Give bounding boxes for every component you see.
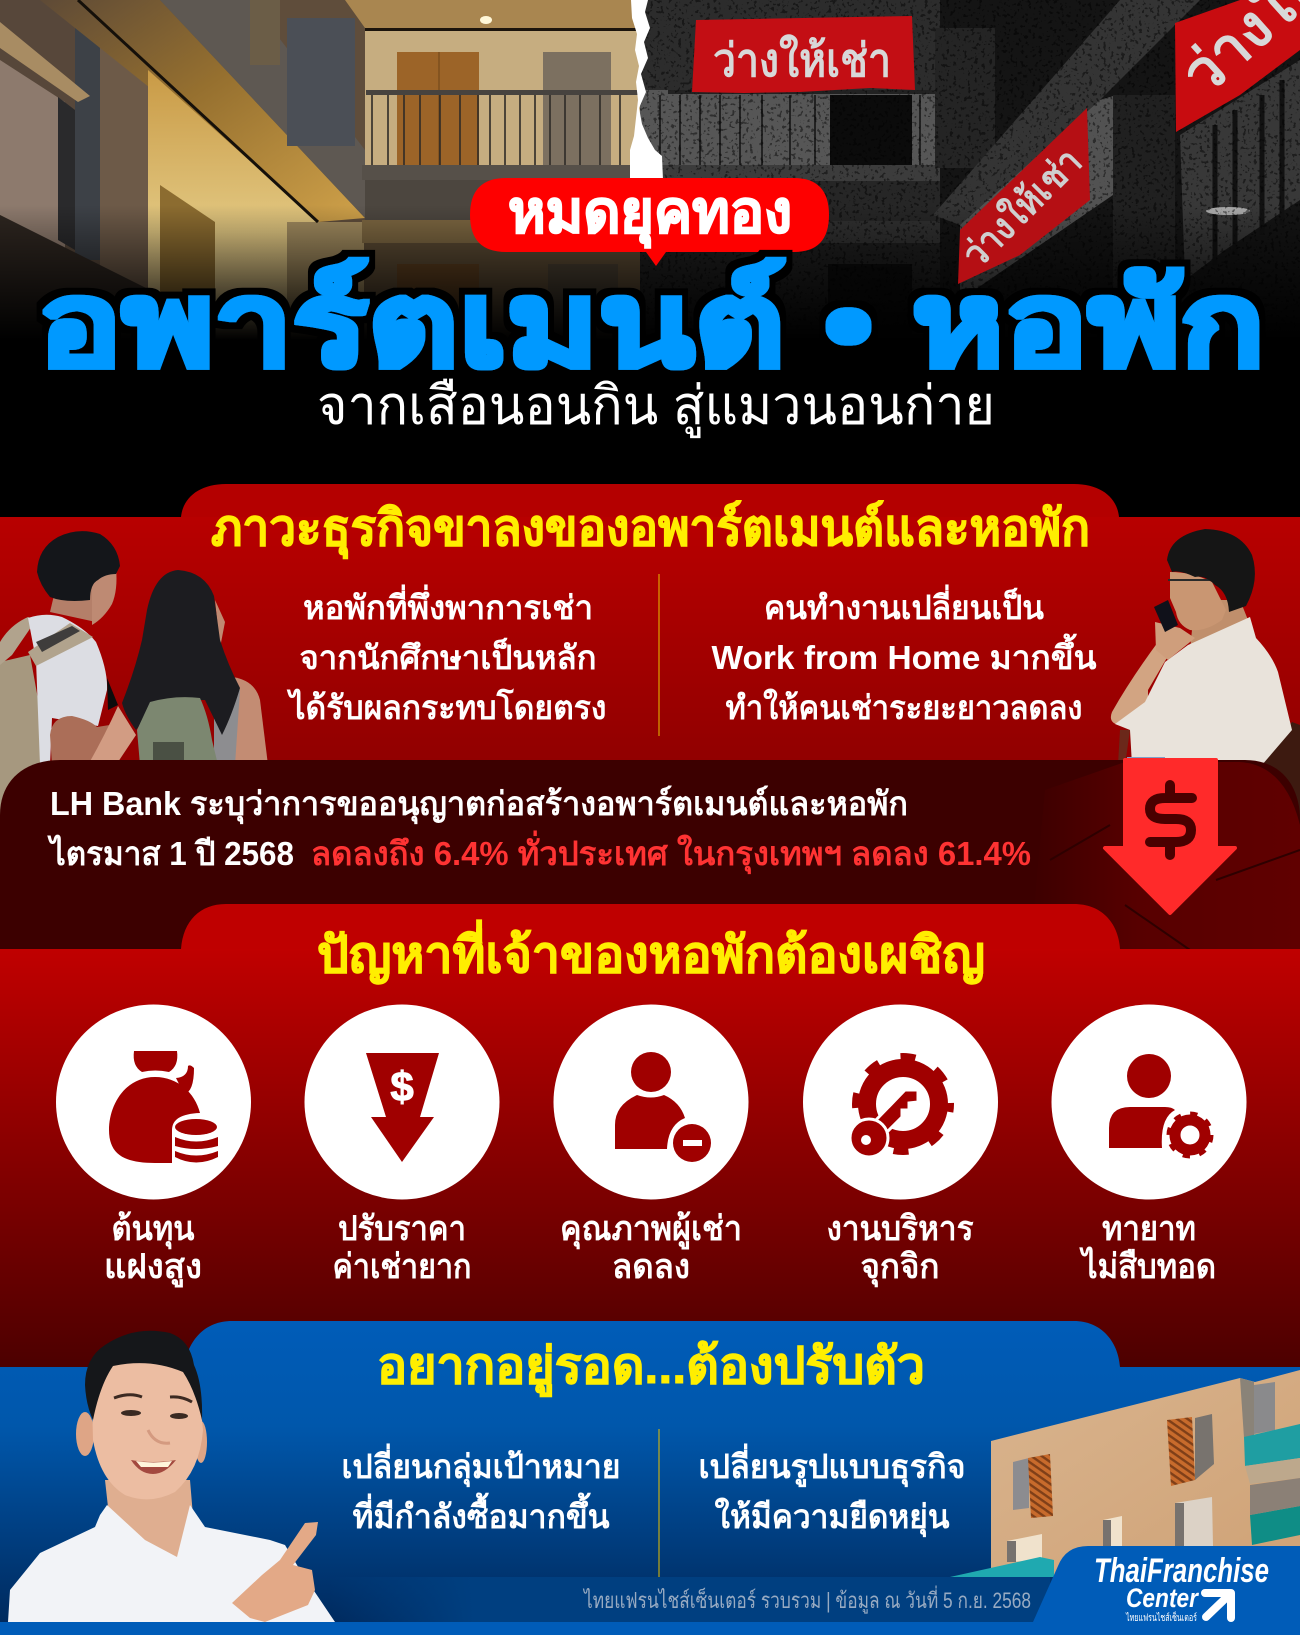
item: management chores [803, 1004, 998, 1288]
icon: dollar down arrow [1105, 760, 1235, 913]
label [826, 1210, 974, 1288]
photo: warm lit apartment building (left half) [0, 0, 640, 340]
icon: logo arrow [1205, 1593, 1231, 1618]
label [560, 1210, 742, 1286]
heading: business decline: ภาวะธุรกิจขาลงของอพาร์ตเมนต์และหอพัก [211, 500, 1090, 559]
label: ทายาท [1102, 1210, 1196, 1248]
statistics highlighted: ลดลงถึง 6.4% ทั่วประเทศ ในกรุงเทพฯ ลดลง 61.4% [311, 830, 1031, 875]
statistics text line 1: LH Bank ระบุว่าการขออนุญาตก่อสร้างอพาร์ตเมนต์และหอพัก [50, 785, 908, 825]
banner: for rent 2: ว่างให้เช่า [953, 139, 1090, 276]
label: ไม่สืบทอด [1079, 1246, 1216, 1286]
label: แฝงสูง [104, 1248, 202, 1288]
text: left point [287, 584, 606, 726]
banner: for rent 1: ว่างให้เช่า [713, 33, 891, 86]
label: คุณภาพผู้เช่า [560, 1210, 742, 1250]
label: ปรับราคา [338, 1210, 466, 1248]
icon: person minus [615, 1052, 711, 1162]
label [1079, 1210, 1216, 1286]
heading: adapt to survive: อยากอยู่รอด...ต้องปรับตัว [377, 1338, 925, 1397]
photo: woman on the phone [1111, 529, 1300, 830]
text: strategy right [698, 1443, 966, 1538]
item: hard to adjust rent [304, 1004, 500, 1286]
banner: for rent 1 [692, 16, 915, 93]
icon: price down arrow [366, 1053, 439, 1162]
label: งานบริหาร [826, 1210, 974, 1248]
panel: blue section adapt to survive [0, 1321, 1300, 1635]
text: right point: Work from Home มากขึ้น [712, 633, 1097, 676]
photo: dark grey abandoned building (right half) [640, 0, 1300, 340]
item: no heirs [1052, 1004, 1246, 1286]
text: left point: ได้รับผลกระทบโดยตรง [287, 688, 606, 726]
text: right point: ทำให้คนเช่าระยะยาวลดลง [726, 688, 1082, 726]
icon: money bag [109, 1051, 218, 1163]
photo: apartment building [950, 1370, 1300, 1577]
label: ค่าเช่ายาก [332, 1248, 472, 1286]
fade to black over photo [0, 205, 1300, 340]
label [104, 1210, 202, 1288]
logo panel: ThaiFranchise Center: Center [1126, 1583, 1199, 1613]
text: strategy left: ที่มีกำลังซื้อมากขึ้น [352, 1492, 610, 1535]
panel: red section business decline [0, 484, 1300, 817]
text: right point [712, 584, 1097, 726]
text: strategy left [342, 1443, 620, 1535]
title: อพาร์ตเมนต์ • หอพัก [38, 258, 1265, 392]
text: strategy right: เปลี่ยนรูปแบบธุรกิจ [698, 1443, 966, 1488]
icon: price down arrow: $ [390, 1063, 414, 1110]
label: จุกจิก [860, 1248, 940, 1288]
panel: LH Bank statistics [0, 760, 1300, 950]
panel: red section owner problems [0, 904, 1300, 1369]
logo panel: ThaiFranchise Center [0, 1546, 1300, 1635]
callout bubble: end of the golden era [470, 178, 829, 266]
label: ต้นทุน [112, 1210, 194, 1250]
icon: person with gear [1109, 1054, 1210, 1156]
logo panel: ThaiFranchise Center: ไทยแฟรนไชส์เซ็นเตอร์ [1125, 1610, 1197, 1624]
subtitle: จากเสือนอนกิน สู่แมวนอนก่าย [317, 376, 995, 438]
item: tenant quality down [554, 1004, 748, 1286]
statistics text line 2: ไตรมาส 1 ปี 2568 [47, 834, 294, 872]
photo: students with backpacks [0, 531, 268, 860]
source note: ไทยแฟรนไชส์เซ็นเตอร์ รวบรวม | ข้อมูล ณ วันที่ 5 ก.ย. 2568 [582, 1585, 1031, 1614]
icon: gear with key [850, 1057, 950, 1157]
heading: owner problems: ปัญหาที่เจ้าของหอพักต้องเผชิญ [317, 920, 985, 984]
text: right point: คนทำงานเปลี่ยนเป็น [764, 584, 1044, 626]
text: left point: หอพักที่พึ่งพาการเช่า [303, 584, 593, 626]
torn paper divider [630, 0, 663, 180]
callout bubble: end of the golden era: หมดยุคทอง [508, 180, 792, 249]
label: ลดลง [612, 1248, 690, 1286]
photo: smiling man pointing [8, 1331, 335, 1622]
item: hidden costs [56, 1004, 251, 1288]
text: strategy left: เปลี่ยนกลุ่มเป้าหมาย [342, 1443, 620, 1488]
text: strategy right: ให้มีความยืดหยุ่น [714, 1497, 950, 1538]
label [332, 1210, 472, 1286]
text: left point: จากนักศึกษาเป็นหลัก [300, 637, 596, 676]
